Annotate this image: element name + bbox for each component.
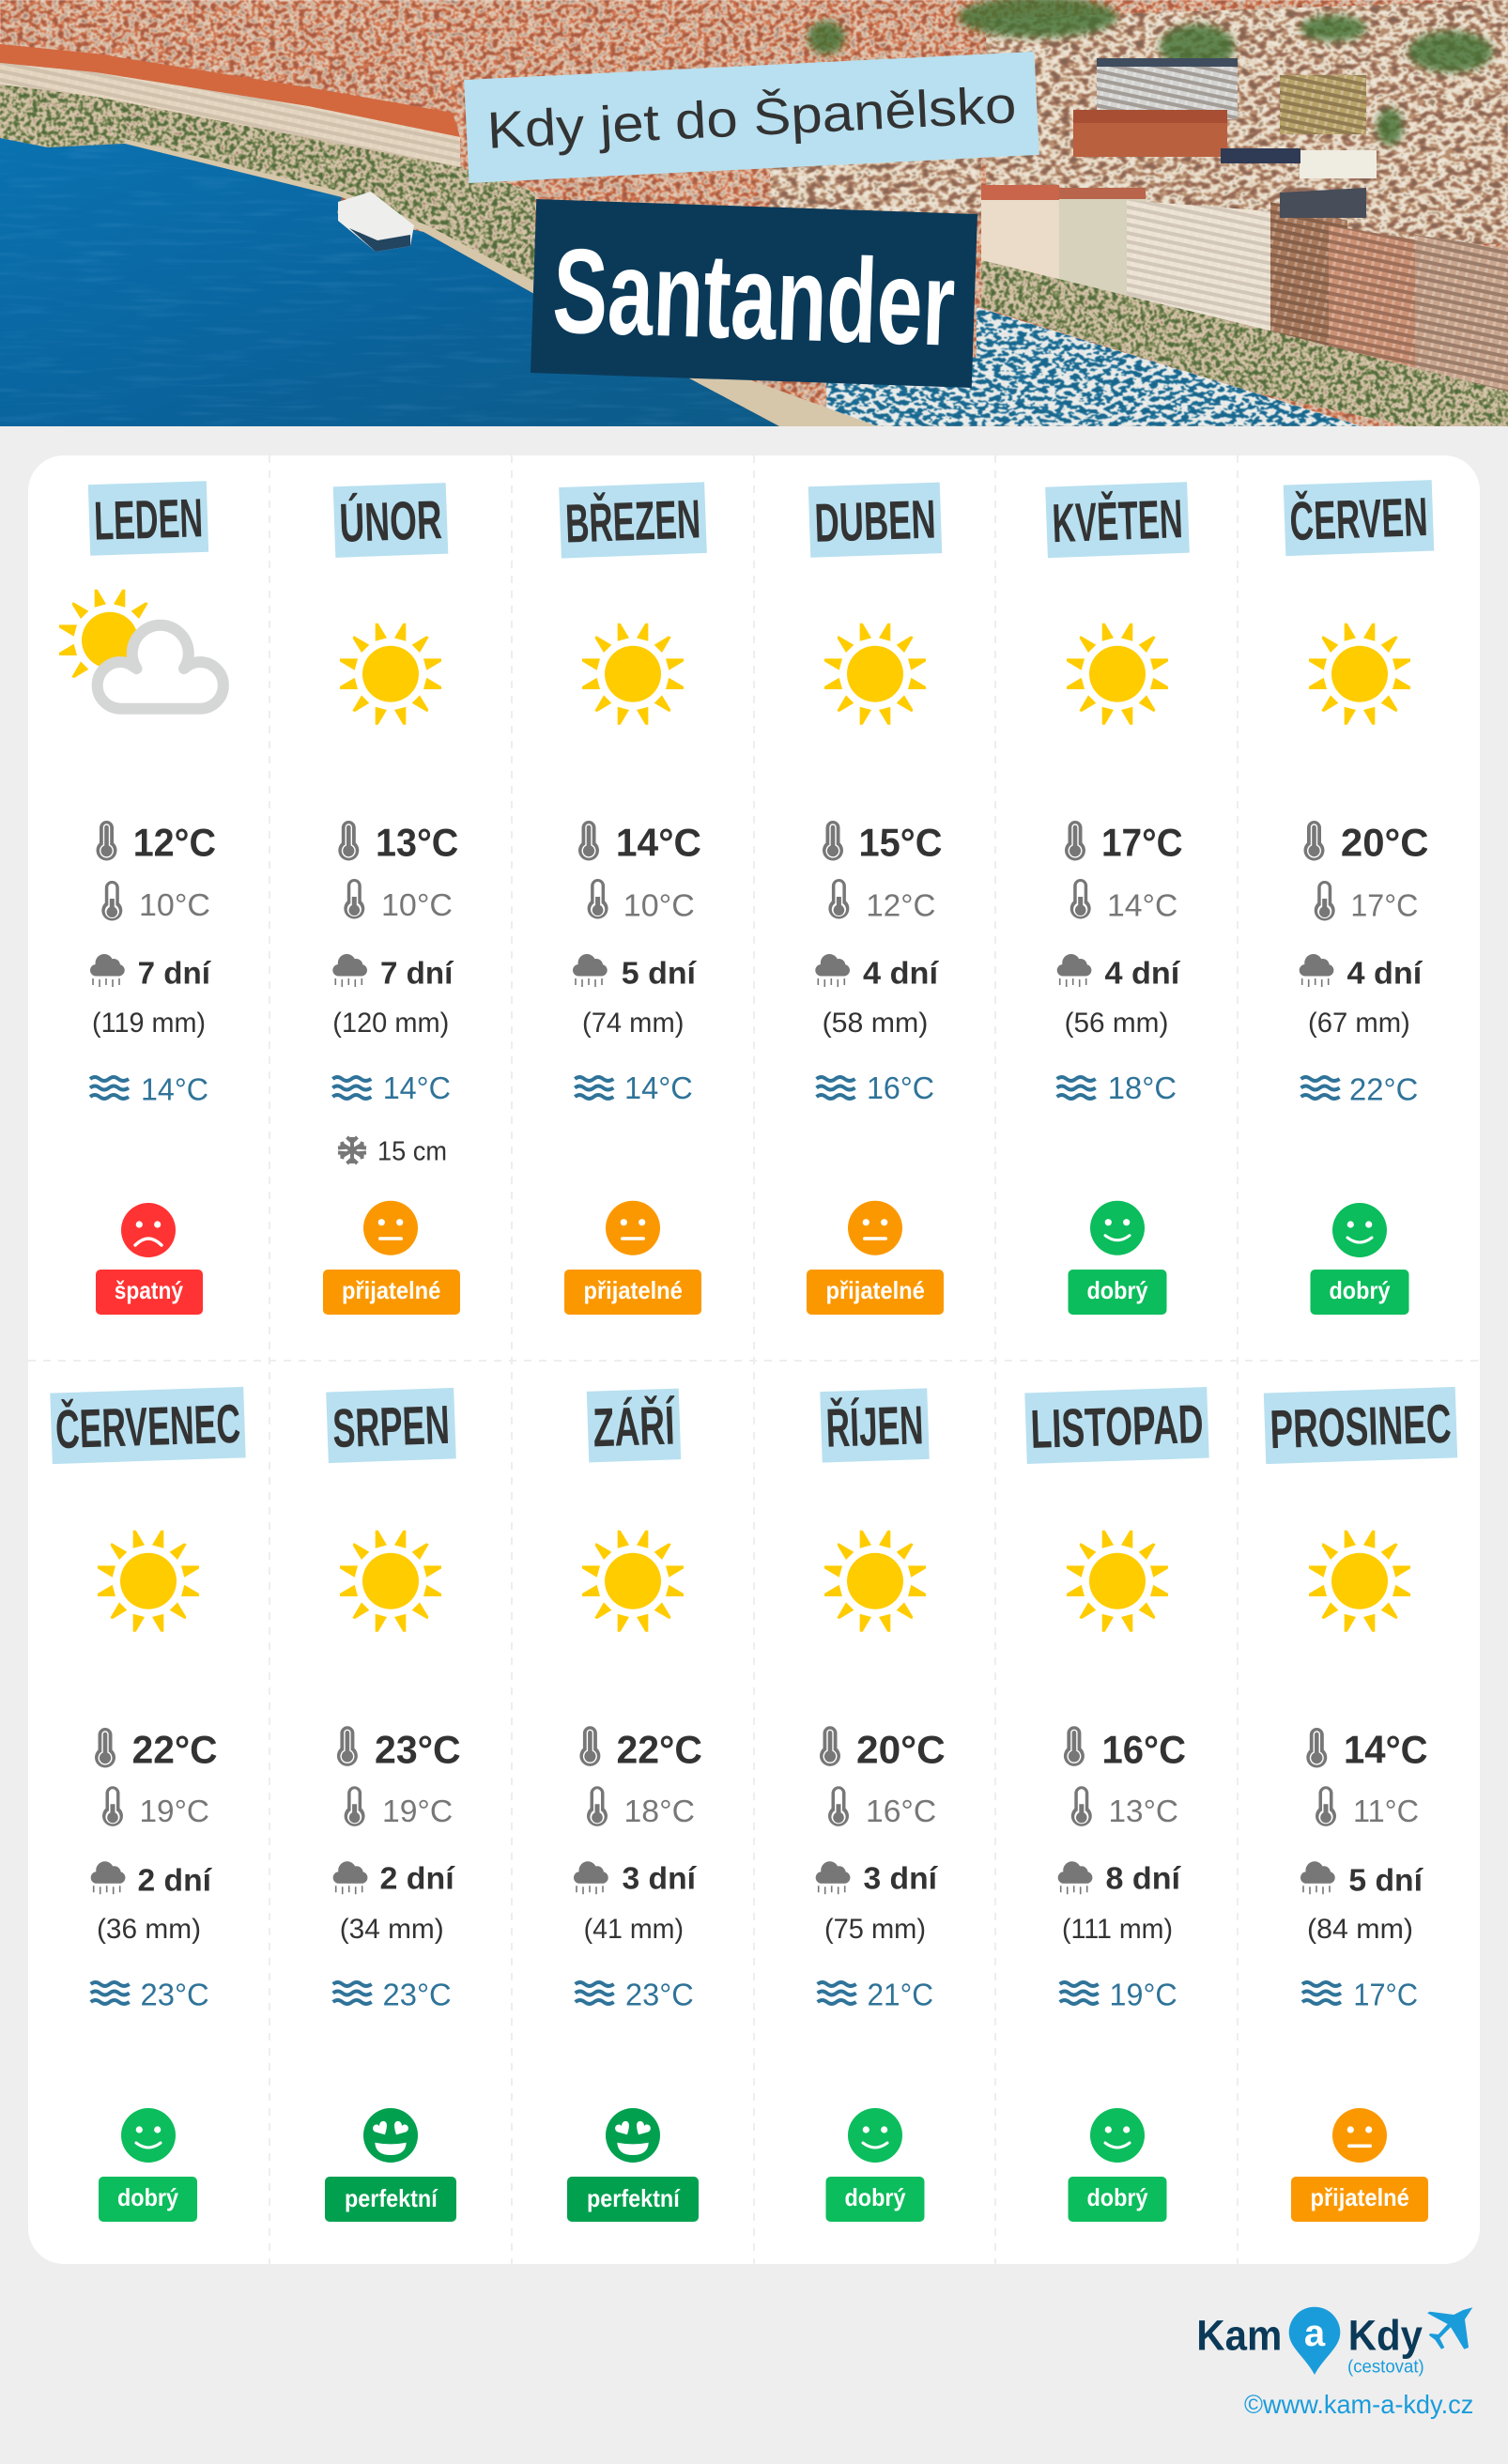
low temperature: 11°C — [1353, 1794, 1419, 1828]
column: ČERVENEC — [50, 1387, 246, 2222]
column: ŘÍJEN — [816, 1388, 946, 2222]
low temperature — [1070, 879, 1177, 923]
rating: přijatelné: přijatelné — [342, 1276, 440, 1304]
logo: Kam a Kdy (cestovat): (cestovat) — [1347, 2358, 1424, 2378]
sea temperature — [818, 1978, 933, 2012]
month heading — [559, 482, 707, 559]
column: KVĚTEN — [1045, 482, 1190, 1315]
rain days: 8 dní — [1106, 1861, 1182, 1896]
high temperature: 20°C — [856, 1727, 946, 1771]
rain days: 5 dní — [622, 956, 698, 991]
snow depth — [338, 1137, 447, 1167]
rating: dobrý: dobrý — [845, 2183, 906, 2211]
rain days — [91, 1861, 213, 1898]
low temperature — [587, 1786, 695, 1828]
high temperature — [1064, 1726, 1186, 1771]
rating: přijatelné — [1291, 2108, 1428, 2222]
sea temperature: 23°C — [625, 1978, 694, 2012]
column: LEDEN — [59, 481, 223, 1315]
waterfront roofs and facades — [0, 44, 460, 167]
high temperature — [823, 821, 943, 865]
bay water — [0, 138, 779, 426]
month heading — [820, 1388, 930, 1463]
icon: sun — [1309, 624, 1410, 725]
icon: sun — [340, 1531, 441, 1632]
month heading — [333, 483, 448, 558]
precipitation: (119 mm) — [92, 1008, 206, 1039]
website credit: ©www.kam-a-kdy.cz — [1244, 2390, 1473, 2419]
low temperature — [102, 1786, 209, 1828]
low temperature — [1316, 1786, 1419, 1828]
month heading: LISTOPAD — [1030, 1394, 1205, 1460]
icon: sun — [1067, 624, 1168, 725]
low temperature — [1315, 881, 1418, 923]
upper right houses — [986, 0, 1508, 244]
sea temperature: 17°C — [1353, 1978, 1418, 2012]
rating: dobrý — [1069, 2108, 1166, 2222]
precipitation: (75 mm) — [824, 1914, 926, 1945]
precipitation: (67 mm) — [1308, 1008, 1410, 1039]
low temperature — [828, 879, 935, 923]
high temperature: 22°C — [616, 1727, 702, 1771]
low temperature — [1071, 1786, 1178, 1828]
low temperature: 10°C — [139, 887, 210, 922]
month heading — [1284, 480, 1434, 556]
icon: sun — [340, 624, 441, 725]
sea temperature — [817, 1070, 934, 1105]
rain days — [1300, 1861, 1424, 1898]
high temperature — [579, 1726, 702, 1771]
icon: sun — [582, 624, 684, 725]
low temperature — [344, 879, 453, 922]
rain days — [573, 954, 698, 991]
column: ČERVEN — [1284, 480, 1434, 1315]
precipitation: (34 mm) — [340, 1914, 444, 1945]
low temperature: 19°C — [139, 1794, 209, 1828]
rain days — [1057, 954, 1181, 991]
moored ship — [338, 192, 414, 252]
rain days — [815, 954, 940, 991]
rating: špatný — [96, 1203, 203, 1315]
month heading — [808, 483, 942, 558]
icon: map pin — [1289, 2307, 1340, 2375]
rating: dobrý — [1069, 1201, 1166, 1315]
sea temperature — [575, 1070, 693, 1105]
precipitation: (58 mm) — [823, 1008, 928, 1039]
column: LISTOPAD — [1024, 1387, 1209, 2222]
sea temperature: 14°C — [624, 1070, 693, 1105]
icon: sun — [1309, 1531, 1410, 1632]
month heading: DUBEN — [814, 489, 937, 554]
high temperature — [95, 1727, 218, 1771]
rain days — [1058, 1861, 1182, 1896]
month heading: ČERVENEC — [54, 1394, 241, 1460]
month heading: BŘEZEN — [564, 488, 701, 555]
high temperature — [820, 1726, 946, 1771]
high temperature — [96, 821, 216, 865]
central buildings — [770, 158, 981, 218]
column: BŘEZEN — [559, 482, 707, 1315]
sea temperature — [90, 1072, 208, 1107]
snow depth: 15 cm — [377, 1137, 447, 1167]
icon: sun behind cloud — [59, 590, 223, 709]
low temperature: 10°C — [623, 888, 695, 923]
high temperature: 15°C — [858, 821, 943, 865]
rating: dobrý: dobrý — [1087, 1276, 1148, 1304]
high temperature: 23°C — [375, 1727, 461, 1771]
rain days: 7 dní — [138, 956, 212, 991]
high temperature: 14°C — [1344, 1727, 1428, 1771]
sea temperature: 23°C — [383, 1978, 452, 2012]
month heading — [1045, 482, 1190, 558]
rain days: 4 dní — [1346, 956, 1423, 991]
month heading: ÚNOR — [338, 489, 443, 554]
promenade with trees — [0, 85, 535, 300]
month heading: ŘÍJEN — [825, 1394, 924, 1459]
title label: Santander — [531, 199, 977, 388]
month heading — [326, 1388, 456, 1463]
rating: perfektní: perfektní — [345, 2184, 438, 2212]
high temperature: 22°C — [132, 1727, 218, 1771]
month heading — [88, 481, 208, 556]
high temperature: 12°C — [133, 821, 216, 865]
high temperature — [1306, 1727, 1428, 1771]
logo: Kam a Kdy (cestovat): Kdy — [1348, 2312, 1423, 2360]
rain days — [90, 954, 212, 991]
rating: dobrý — [826, 2108, 924, 2222]
precipitation: (84 mm) — [1307, 1914, 1413, 1945]
precipitation: (36 mm) — [97, 1914, 201, 1945]
icon: sun — [824, 624, 926, 725]
rating: dobrý — [99, 2108, 197, 2222]
sea temperature — [1060, 1978, 1177, 2012]
sea temperature — [1302, 1978, 1418, 2012]
high temperature: 13°C — [376, 821, 458, 865]
icon: map pin: a — [1304, 2313, 1326, 2354]
sea temperature — [576, 1978, 694, 2012]
high temperature — [338, 821, 458, 865]
low temperature: 10°C — [381, 887, 453, 922]
column: ÚNOR — [323, 483, 460, 1315]
precipitation: (120 mm) — [332, 1008, 449, 1039]
title label: Kdy jet do Španělsko — [464, 52, 1039, 183]
month heading — [587, 1389, 681, 1462]
icon: sun — [824, 1531, 926, 1632]
rating: dobrý — [1311, 1203, 1408, 1315]
precipitation: (41 mm) — [584, 1914, 684, 1945]
sea temperature: 18°C — [1108, 1070, 1177, 1105]
sea temperature: 14°C — [141, 1072, 208, 1107]
low temperature — [588, 879, 695, 923]
high temperature — [578, 821, 701, 865]
rating: perfektní: perfektní — [587, 2184, 680, 2212]
rating: dobrý: dobrý — [1087, 2183, 1148, 2211]
rating: perfektní — [325, 2108, 456, 2222]
precipitation: (111 mm) — [1062, 1914, 1173, 1945]
icon: sun — [582, 1531, 684, 1632]
title label: Kdy jet do Španělsko: Kdy jet do Španělsko — [485, 75, 1018, 160]
rating: přijatelné: přijatelné — [1311, 2183, 1409, 2211]
high temperature: 20°C — [1341, 821, 1429, 865]
rain days: 3 dní — [864, 1861, 939, 1896]
rain days — [333, 1861, 456, 1896]
low temperature: 17°C — [1350, 888, 1418, 923]
high temperature: 14°C — [616, 821, 701, 865]
month heading: SRPEN — [331, 1394, 451, 1459]
rating: přijatelné: přijatelné — [584, 1276, 683, 1304]
high temperature — [337, 1726, 461, 1771]
rain days: 4 dní — [1104, 956, 1181, 991]
rating: dobrý: dobrý — [1330, 1276, 1391, 1304]
rain days: 2 dní — [379, 1861, 456, 1896]
sea temperature: 19°C — [1110, 1978, 1177, 2012]
marina with boats — [826, 307, 1362, 426]
precipitation: (56 mm) — [1065, 1008, 1168, 1039]
sea temperature — [91, 1978, 209, 2012]
rating: dobrý: dobrý — [117, 2183, 178, 2211]
rain days: 4 dní — [863, 956, 940, 991]
low temperature: 18°C — [623, 1794, 695, 1828]
sea temperature — [1301, 1072, 1418, 1107]
sea temperature: 23°C — [141, 1978, 209, 2012]
rating: přijatelné — [807, 1201, 944, 1315]
sea temperature — [332, 1070, 451, 1105]
rain days: 2 dní — [137, 1863, 213, 1898]
low temperature — [828, 1786, 936, 1828]
low temperature — [345, 1786, 453, 1828]
sea temperature: 22°C — [1349, 1072, 1418, 1107]
tower blocks — [1073, 58, 1377, 178]
rain days: 3 dní — [622, 1861, 698, 1896]
column: DUBEN — [807, 483, 944, 1315]
low temperature: 16°C — [866, 1794, 936, 1828]
rain days — [574, 1861, 698, 1896]
rating: přijatelné — [564, 1201, 701, 1315]
rain days — [1300, 954, 1423, 991]
sea temperature: 16°C — [867, 1070, 934, 1105]
low temperature: 14°C — [1107, 888, 1177, 923]
icon: airplane — [1427, 2307, 1472, 2349]
logo: Kam a Kdy (cestovat): Kam — [1196, 2312, 1282, 2360]
quay edge — [125, 139, 878, 426]
column: ZÁŘÍ — [567, 1389, 702, 2222]
title label: Santander: Santander — [551, 223, 957, 372]
high temperature: 17°C — [1101, 821, 1183, 865]
high temperature — [1065, 821, 1183, 865]
panel: monthly climate card — [28, 455, 1480, 2264]
rating: perfektní — [567, 2108, 699, 2222]
high temperature: 16°C — [1102, 1727, 1186, 1771]
low temperature: 19°C — [382, 1794, 453, 1828]
low temperature: 12°C — [866, 888, 935, 923]
rating: špatný: špatný — [115, 1276, 183, 1304]
rating: přijatelné — [323, 1201, 460, 1315]
low temperature: 13°C — [1108, 1794, 1178, 1828]
month heading: ZÁŘÍ — [592, 1395, 677, 1458]
sea temperature: 21°C — [868, 1978, 933, 2012]
sea temperature — [1057, 1070, 1177, 1105]
column: SRPEN — [325, 1388, 461, 2222]
city rooftops — [0, 0, 1508, 426]
icon: sun — [98, 1531, 199, 1632]
sea temperature — [333, 1978, 452, 2012]
icon: sun — [1067, 1531, 1168, 1632]
rain days: 7 dní — [380, 956, 454, 991]
right-hand apartment facades — [981, 185, 1508, 404]
rain days — [816, 1861, 939, 1896]
rain days: 5 dní — [1348, 1863, 1424, 1898]
precipitation: (74 mm) — [582, 1008, 684, 1039]
rating: přijatelné: přijatelné — [826, 1276, 925, 1304]
seafront road — [981, 260, 1508, 426]
column: PROSINEC — [1264, 1387, 1457, 2222]
month heading — [50, 1387, 246, 1464]
low temperature — [101, 881, 210, 922]
logo: Kam a Kdy (cestovat) — [1196, 2307, 1472, 2378]
hero photo: Santander aerial view — [0, 0, 1508, 426]
rain days — [332, 954, 454, 991]
month heading — [1024, 1387, 1209, 1464]
month heading: LEDEN — [93, 487, 204, 552]
month heading: KVĚTEN — [1051, 488, 1184, 554]
sea temperature: 14°C — [383, 1070, 451, 1105]
green hillside — [808, 0, 1493, 152]
